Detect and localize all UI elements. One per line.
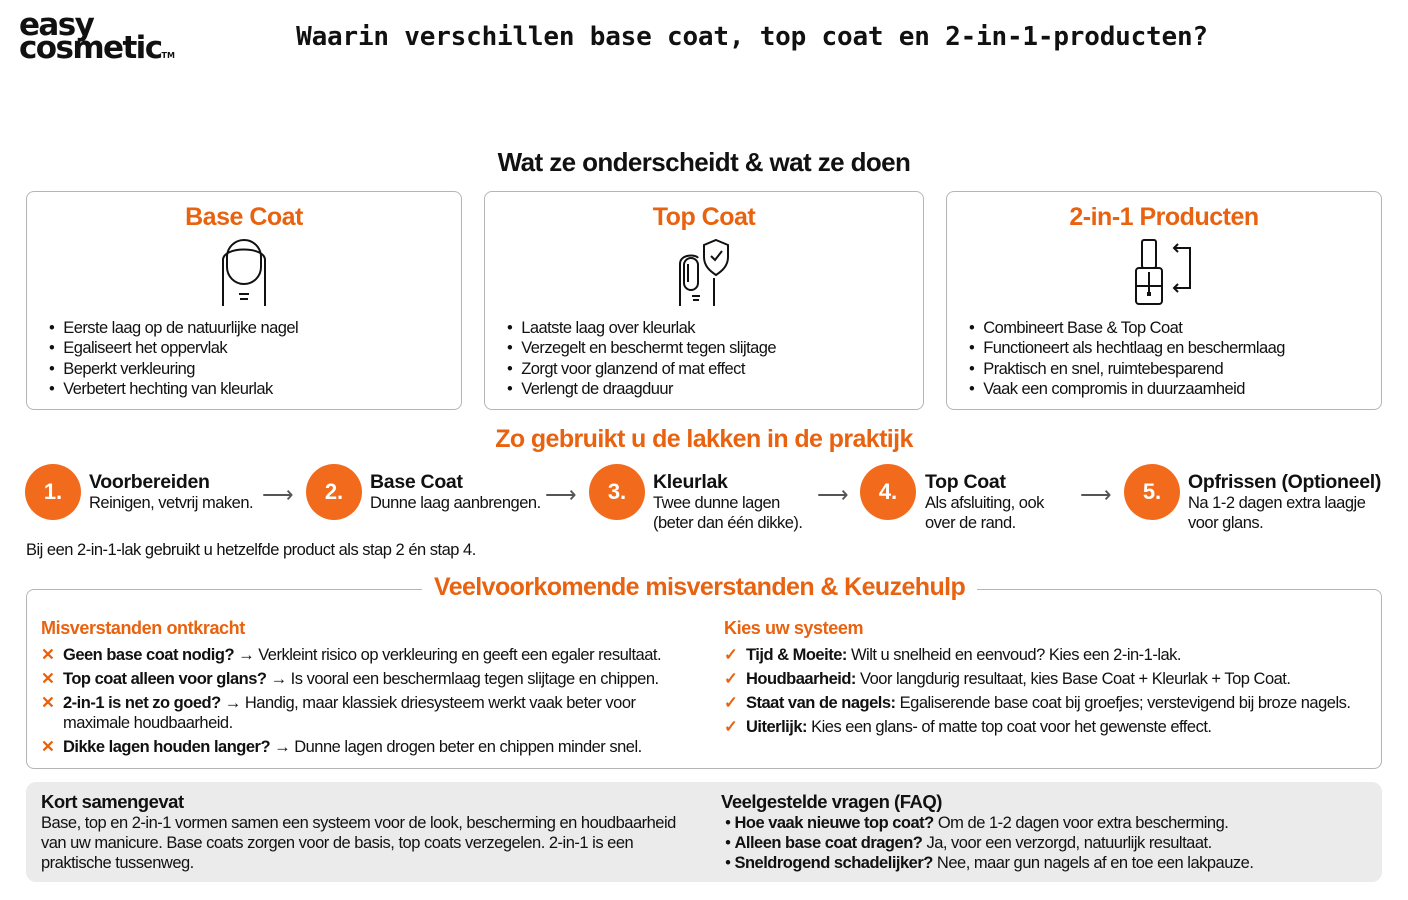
step 4: 4.: [879, 479, 897, 504]
summary: Base, top en 2-in-1 vormen samen een systeem voor de look, bescherming en houdbaarheid van uw manicure. Base coats zorgen voor de basis, top coats verzegelen. 2-in-1 is een praktische tussenweg.: [41, 814, 676, 872]
step 2: Base Coat: [370, 471, 463, 493]
misverstanden list: ✕: [41, 738, 54, 756]
panel: base coat: Eerste laag op de natuurlijke nagel: [63, 319, 298, 337]
heading: Veelvoorkomende misverstanden & Keuzehulp: [434, 573, 965, 601]
title: Waarin verschillen base coat, top coat en 2-in-1-producten?: [296, 22, 1208, 52]
step 1: 1.: [44, 479, 62, 504]
panel: base coat: Verbetert hechting van kleurlak: [63, 380, 273, 398]
panel: summary & FAQ: [26, 782, 1382, 882]
step 1: Reinigen, vetvrij maken.: [89, 494, 253, 512]
step 5: voor glans.: [1188, 514, 1263, 532]
panel: top coat: Verzegelt en beschermt tegen slijtage: [521, 339, 776, 357]
keuzehulp list: Staat van de nagels: Egaliserende base coat bij groefjes; verstevigend bij broze nagels.: [746, 694, 1350, 712]
panel: base coat: Base Coat: [185, 203, 303, 231]
panel: base coat: [26, 191, 462, 410]
keuzehulp list: Kies uw systeem: [724, 618, 863, 638]
keuzehulp list: Uiterlijk: Kies een glans- of matte top coat voor het gewenste effect.: [746, 718, 1212, 736]
misverstanden list: Top coat alleen voor glans? → Is vooral een beschermlaag tegen slijtage en chippen.: [63, 670, 659, 688]
keuzehulp list: Houdbaarheid: Voor langdurig resultaat, kies Base Coat + Kleurlak + Top Coat.: [746, 670, 1290, 688]
step 3: [589, 464, 803, 532]
panel: 2-in-1: Vaak een compromis in duurzaamheid: [983, 380, 1245, 398]
keuzehulp list: ✓: [724, 694, 737, 712]
keuzehulp list: ✓: [724, 718, 737, 736]
keuzehulp list: ✓: [724, 646, 737, 664]
arrow 3: ⟶: [817, 482, 849, 507]
logo: cosmeticTM: [19, 30, 175, 66]
arrow 1: ⟶: [262, 482, 294, 507]
misverstanden list: Misverstanden ontkracht: [41, 618, 245, 638]
misverstanden list: 2-in-1 is net zo goed? → Handig, maar klassiek driesysteem werkt vaak beter voor maximale houdbaarheid.: [63, 694, 636, 732]
misverstanden list: [41, 618, 661, 756]
logo: easy: [19, 7, 93, 43]
step 2: 2.: [325, 479, 343, 504]
subtitle: Wat ze onderscheidt & wat ze doen: [498, 147, 910, 177]
arrow 4: ⟶: [1080, 482, 1112, 507]
step 3: Kleurlak: [653, 471, 728, 493]
step 4: [860, 464, 1044, 532]
panel: base coat: Egaliseert het oppervlak: [63, 339, 227, 357]
panel: 2-in-1: 2-in-1 Producten: [1069, 203, 1259, 231]
misverstanden list: ✕: [41, 670, 54, 688]
step 1: [25, 464, 253, 520]
panel: top coat: Verlengt de draagduur: [521, 380, 673, 398]
keuzehulp list: ✓: [724, 670, 737, 688]
step 3: (beter dan één dikke).: [653, 514, 803, 532]
step 4: Als afsluiting, ook: [925, 494, 1044, 512]
step 4: over de rand.: [925, 514, 1016, 532]
FAQ: Veelgestelde vragen (FAQ): [721, 791, 942, 812]
logo: [19, 7, 175, 66]
panel: base coat: Beperkt verkleuring: [63, 360, 195, 378]
step 5: Na 1-2 dagen extra laagje: [1188, 494, 1365, 512]
step 3: 3.: [608, 479, 626, 504]
keuzehulp list: [724, 618, 1350, 736]
FAQ: • Hoe vaak nieuwe top coat? Om de 1-2 dagen voor extra bescherming.: [725, 814, 1228, 832]
heading: praktijk: Zo gebruikt u de lakken in de praktijk: [495, 425, 913, 453]
step 5: [1124, 464, 1381, 532]
panel: 2-in-1: Functioneert als hechtlaag en beschermlaag: [983, 339, 1285, 357]
panel: top coat: Zorgt voor glanzend of mat effect: [521, 360, 745, 378]
step 3: Twee dunne lagen: [653, 494, 780, 512]
panel: top coat: Top Coat: [653, 203, 755, 231]
misverstanden list: Dikke lagen houden langer? → Dunne lagen drogen beter en chippen minder snel.: [63, 738, 642, 756]
FAQ: • Alleen base coat dragen? Ja, voor een verzorgd, natuurlijk resultaat.: [725, 834, 1212, 852]
FAQ: • Sneldrogend schadelijker? Nee, maar gun nagels af en toe een lakpauze.: [725, 854, 1253, 872]
step 2: Dunne laag aanbrengen.: [370, 494, 541, 512]
icon: bottle with arrows: [1135, 239, 1191, 305]
panel: 2-in-1: Combineert Base & Top Coat: [983, 319, 1182, 337]
panel: top coat: Laatste laag over kleurlak: [521, 319, 695, 337]
panel: misverstanden & keuzehulp: [26, 589, 1382, 769]
icon: nail with shield: [679, 238, 729, 306]
misverstanden list: ✕: [41, 694, 54, 712]
misverstanden list: ✕: [41, 646, 54, 664]
panel: top coat: [484, 191, 924, 410]
icon: nail: [222, 239, 266, 306]
step 5: 5.: [1143, 479, 1161, 504]
step 5: Opfrissen (Optioneel): [1188, 471, 1381, 493]
misverstanden list: Geen base coat nodig? → Verkleint risico op verkleuring en geeft een egaler resultaat.: [63, 646, 661, 664]
panel: 2-in-1: [946, 191, 1382, 410]
panel: 2-in-1: Praktisch en snel, ruimtebesparend: [983, 360, 1223, 378]
step 4: Top Coat: [925, 471, 1006, 493]
FAQ: [721, 791, 1253, 872]
arrow 2: ⟶: [545, 482, 577, 507]
step 1: Voorbereiden: [89, 471, 210, 493]
step 2: [306, 464, 541, 520]
keuzehulp list: Tijd & Moeite: Wilt u snelheid en eenvoud? Kies een 2-in-1-lak.: [746, 646, 1181, 664]
note: Bij een 2-in-1-lak gebruikt u hetzelfde product als stap 2 én stap 4.: [26, 541, 476, 559]
summary: Kort samengevat: [41, 791, 184, 812]
